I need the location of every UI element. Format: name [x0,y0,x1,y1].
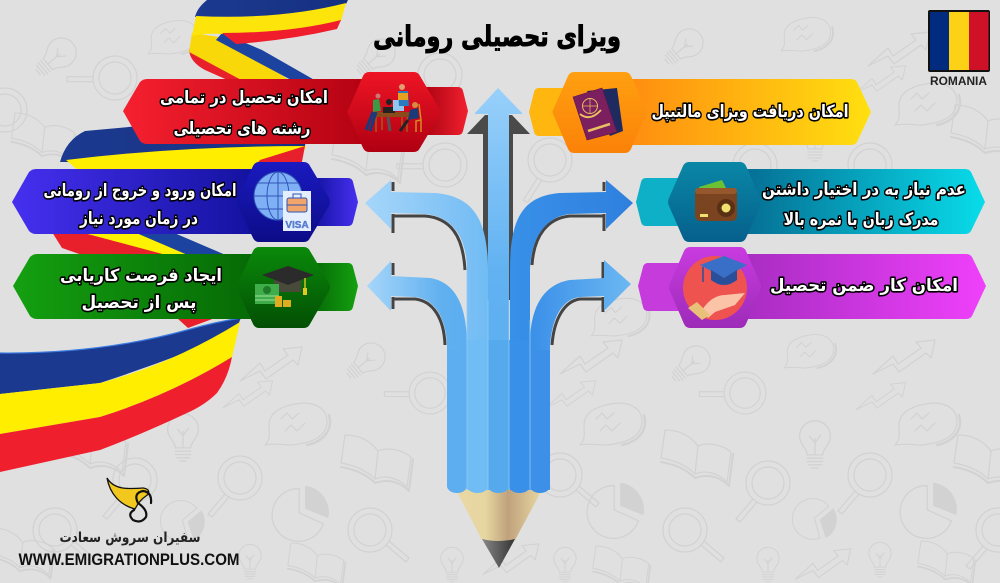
logo: website: WWW.EMIGRATIONPLUS.COM [18,551,240,569]
icon: wallet [695,180,737,221]
label text: امکان کار ضمن تحصیل [770,276,958,296]
panel: all fields of study (red): رشته های تحصیلی [174,119,310,139]
logo: wing [107,478,149,509]
flag of Romania [928,10,990,88]
icon: passports [573,88,623,140]
flag caption: ROMANIA [930,76,987,88]
hexagon badge [348,72,440,152]
hexagon badge [237,162,330,242]
hexagon badge [669,247,761,328]
panel: no language certificate (teal) [636,162,985,242]
hexagon badge [237,247,330,328]
hexagon badge [668,162,761,242]
pencil with arrows [365,88,633,568]
panel: entry and exit (blue) [12,162,358,242]
ribbon: middle band [60,126,306,172]
arrow: lower left [367,261,467,480]
Romanian flag ribbon [0,0,348,472]
arrow: up, centre [467,88,530,490]
panel: job opportunity (green): پس از تحصیل [82,293,196,313]
panel: no language certificate (teal): مدرک زبان با نمره بالا [784,210,938,230]
arrow: lower right [530,260,631,490]
label text: عدم نیاز به در اختیار داشتن [762,180,966,200]
ribbon: top band [192,0,348,44]
logo [18,478,240,569]
label text: امکان دریافت ویزای مالتیپل [652,102,848,122]
hexagon badge [552,72,646,153]
label text: امکان ورود و خروج از رومانی [44,181,236,201]
icon: people around a table [366,84,421,132]
pencil body strips [447,270,550,493]
logo: Persian name: سفیران سروش سعادت [60,530,200,546]
icon: graduation cap and money [255,266,314,307]
panel: work while studying (purple) [638,247,986,328]
icon: globe and visa card [254,172,311,231]
ribbon: large bottom band [0,318,241,472]
panel: entry and exit (blue): در زمان مورد نیاز [79,209,198,229]
title: ویزای تحصیلی رومانی [373,19,621,54]
arrow: upper left [365,180,488,490]
icon: hand with graduation cap [683,256,747,320]
panel: multiple visa (orange) [529,72,871,153]
panel: all fields of study (red) [123,72,468,152]
panel: job opportunity (green) [13,247,358,328]
arrow: upper right [510,180,633,490]
pencil lead [482,539,515,568]
label text: ایجاد فرصت کاریابی [60,266,222,286]
pencil wood tip [455,488,543,542]
logo: swan S [130,491,151,521]
ribbon: back twist stripes [52,33,318,328]
icon: globe and visa card: VISA [285,220,309,231]
label text: امکان تحصیل در تمامی [160,88,328,108]
